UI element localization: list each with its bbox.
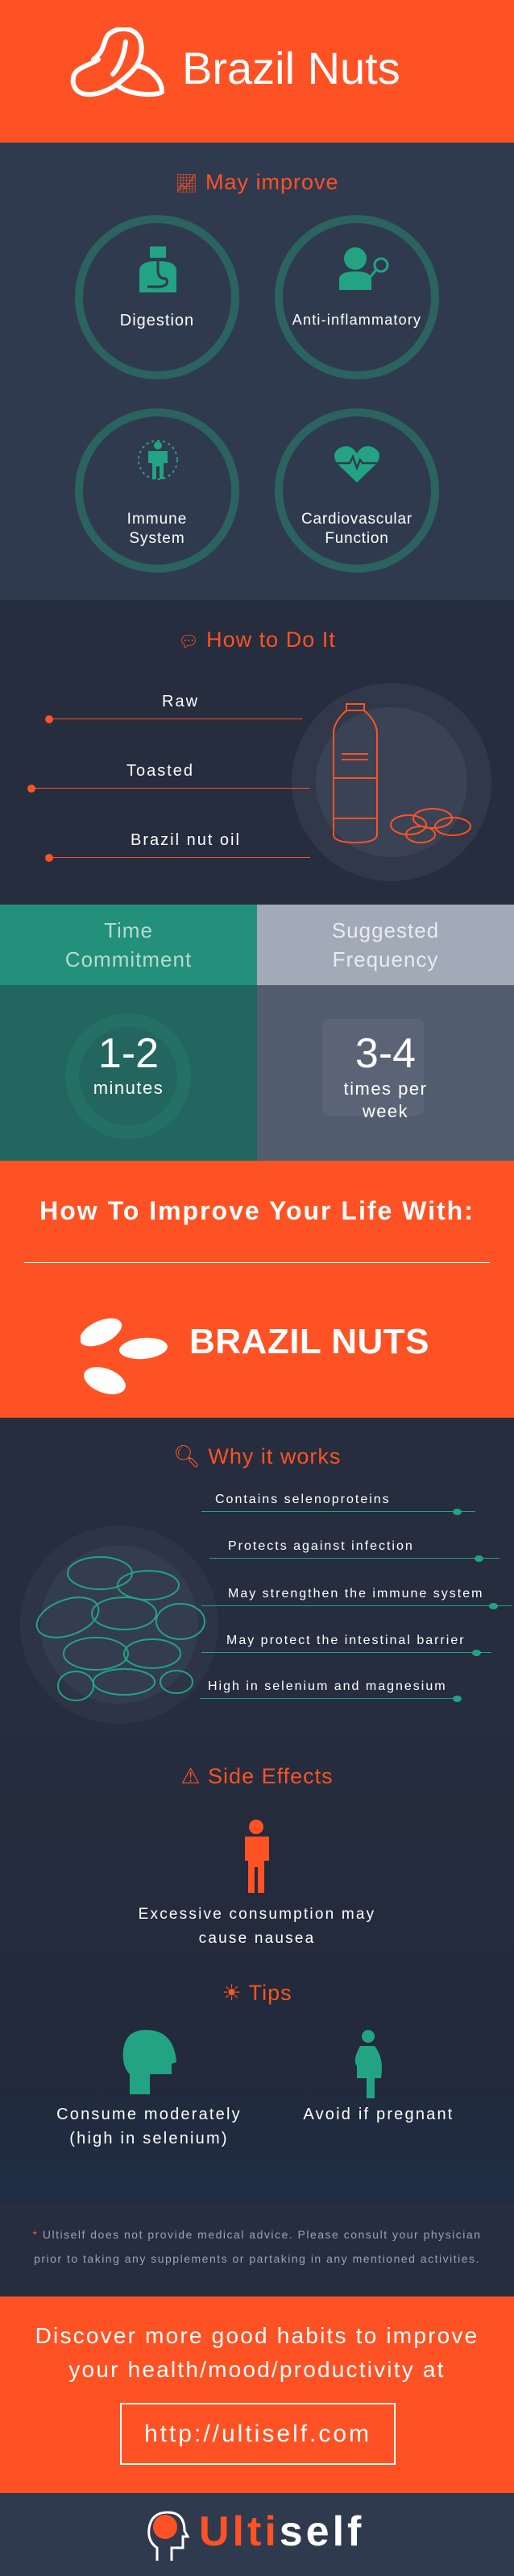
panel: how to do it xyxy=(0,600,514,905)
panel: time commitment xyxy=(0,905,257,1161)
option: brazil nut oil xyxy=(45,831,310,862)
value: 3-4 times per week xyxy=(343,1030,427,1121)
logo: ultiself: Ultiself xyxy=(199,2508,364,2555)
icon: clock background xyxy=(65,1013,191,1139)
heading: time commitment: Time xyxy=(104,918,153,942)
heading: how to do it: 💬︎ How to Do It xyxy=(178,627,336,652)
panel: call to action xyxy=(0,2296,514,2493)
panel: why it works xyxy=(0,1418,514,1732)
tip: avoid if pregnant: Avoid if pregnant xyxy=(303,2106,454,2123)
text: nausea xyxy=(139,1906,375,1947)
heading: how to improve: How To Improve Your Life With: xyxy=(39,1196,475,1225)
text: discover more: Discover more good habits to improve xyxy=(35,2323,479,2348)
illustration: nuts pile xyxy=(35,1546,205,1704)
heading: suggested frequency xyxy=(257,905,514,985)
heading: time commitment: Commitment xyxy=(65,947,192,971)
option: toasted: Toasted xyxy=(126,762,194,780)
heading: may improve: 📈︎ May improve xyxy=(176,170,338,194)
reason list: High in selenium and magnesium xyxy=(208,1679,447,1693)
reason list: May strengthen the immune system xyxy=(228,1587,483,1601)
value: 3-4 times per week: times per xyxy=(343,1079,427,1099)
benefit: cardiovascular xyxy=(275,408,439,573)
disclaimer: * Ultiself does not provide medical advice. Please consult your physician xyxy=(33,2228,481,2241)
disclaimer: prior to taking any supplements or partaking in any mentioned activities. xyxy=(34,2252,480,2265)
footer xyxy=(0,2493,514,2576)
panel: side effects and tips xyxy=(0,1732,514,2201)
icon: brazil nut outline xyxy=(71,27,164,97)
button: url xyxy=(120,2403,396,2465)
tip: consume moderately: (high in selenium) xyxy=(69,2130,229,2147)
heading: tips: ☀︎ Tips xyxy=(222,1981,292,2005)
option: raw: Raw xyxy=(162,693,199,710)
panel: suggested frequency xyxy=(257,905,514,1161)
reason list xyxy=(200,1493,512,1702)
icon: nuts xyxy=(81,1318,168,1394)
icon: nauseous person xyxy=(245,1820,269,1893)
benefit: digestion xyxy=(75,215,239,379)
benefit: digestion: Digestion xyxy=(120,312,194,329)
heading: suggested frequency: Frequency xyxy=(333,947,438,971)
panel: may improve xyxy=(0,143,514,600)
benefit: anti-inflammatory: Anti-inflammatory xyxy=(292,312,421,328)
heading: why it works: 🔍︎ Why it works xyxy=(173,1444,341,1468)
disclaimer xyxy=(0,2201,514,2296)
panel: how to improve banner xyxy=(0,1161,514,1418)
icon: calendar background xyxy=(322,1019,424,1116)
text: nausea: Excessive consumption may xyxy=(139,1906,375,1923)
benefit: cardiovascular: Cardiovascular xyxy=(301,511,412,528)
text: discover more xyxy=(35,2323,479,2382)
tip: avoid if pregnant xyxy=(303,2030,454,2123)
button: url: http://ultiself.com xyxy=(144,2421,371,2447)
benefit: cardiovascular: Function xyxy=(325,530,389,547)
heading: side effects: ⚠︎ Side Effects xyxy=(180,1764,334,1788)
reason list: Contains selenoproteins xyxy=(215,1493,391,1506)
option: raw xyxy=(45,693,302,723)
option: toasted xyxy=(27,762,309,793)
option: brazil nut oil: Brazil nut oil xyxy=(131,831,241,849)
reason list: May protect the intestinal barrier xyxy=(226,1634,466,1647)
header xyxy=(0,0,514,143)
benefit: immune system: System xyxy=(129,530,185,547)
value: 3-4 times per week: 3-4 xyxy=(355,1030,416,1077)
title: Brazil Nuts xyxy=(182,43,400,93)
heading: time commitment xyxy=(0,905,257,985)
value: 1-2 minutes xyxy=(93,1030,164,1098)
text: discover more: your health/mood/productivity at xyxy=(68,2357,446,2382)
illustration: bottle and nuts xyxy=(292,683,491,881)
benefit: immune system: Immune xyxy=(127,511,187,528)
benefit: anti-inflammatory xyxy=(275,215,439,379)
value: 1-2 minutes: minutes xyxy=(93,1078,164,1098)
benefit: immune system xyxy=(75,408,239,573)
tip: consume moderately xyxy=(56,2030,242,2147)
value: 3-4 times per week: week xyxy=(363,1101,408,1121)
logo: ultiself xyxy=(147,2508,364,2561)
title: brazil nuts: BRAZIL NUTS xyxy=(189,1322,429,1361)
reason list: Protects against infection xyxy=(228,1539,414,1553)
heading: suggested frequency: Suggested xyxy=(332,918,439,942)
text: nausea: cause nausea xyxy=(199,1930,315,1947)
tip: consume moderately: Consume moderately xyxy=(56,2106,242,2123)
value: 1-2 minutes: 1-2 xyxy=(98,1030,159,1077)
